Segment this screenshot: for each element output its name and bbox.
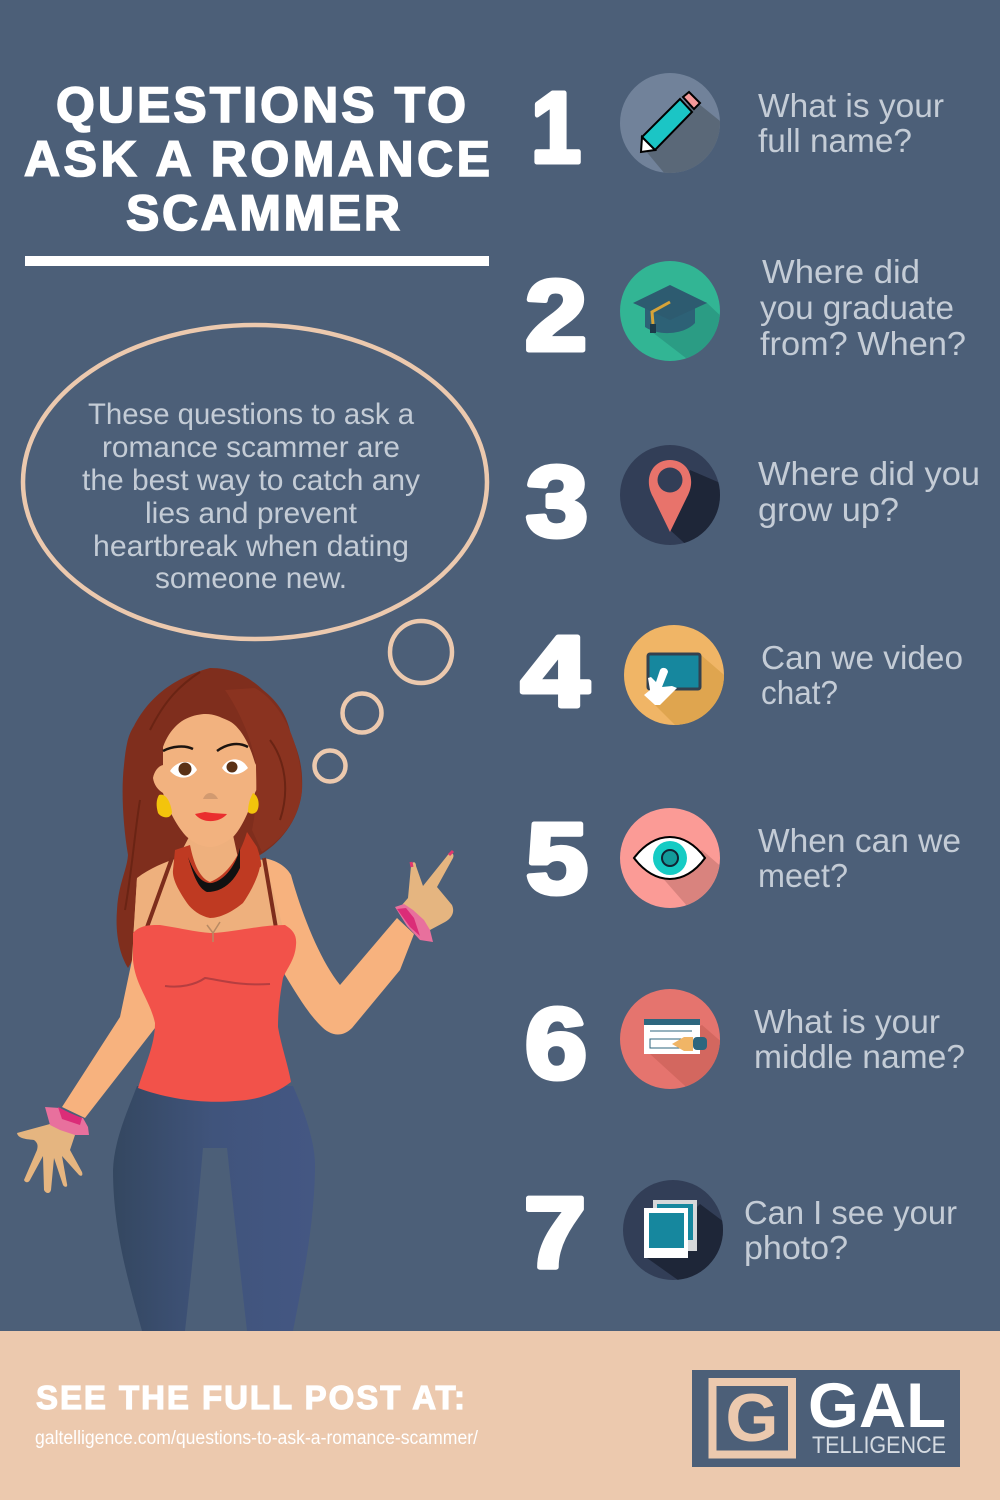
question text 3: Where did you: [758, 455, 980, 492]
chest and neck: [133, 835, 285, 940]
face: [153, 714, 260, 847]
earrings: [157, 795, 172, 817]
title: QUESTIONS TO: [56, 77, 466, 133]
thought bubble: the best way to catch any: [82, 464, 420, 497]
icon: eye: [620, 808, 720, 908]
thought bubble: [23, 325, 487, 782]
question text 6: middle name?: [754, 1038, 965, 1075]
question 4: [520, 625, 962, 725]
question text 7: [744, 1194, 957, 1266]
eyes and brows: [163, 744, 248, 778]
number 3: 3: [526, 446, 588, 558]
number 7: 7: [524, 1177, 586, 1289]
number 2: 2: [525, 260, 587, 372]
thought bubble: lies and prevent: [145, 497, 358, 530]
question text 7: Can I see your: [744, 1194, 957, 1231]
question text 3: grow up?: [758, 491, 899, 528]
question 6: [526, 989, 964, 1089]
top straps: [146, 858, 276, 930]
hair streaks: [225, 688, 302, 852]
logo: [692, 1370, 960, 1467]
right arm: [262, 858, 414, 1034]
icon: photos: [623, 1180, 728, 1285]
nose and lips: [203, 793, 218, 799]
number 4: 4: [521, 616, 589, 728]
question text 2: from? When?: [760, 325, 966, 362]
lowered wrist scrunchie: [45, 1107, 89, 1135]
question 5: [526, 808, 960, 908]
question text 5: When can we: [758, 822, 961, 859]
scarf: [173, 832, 261, 918]
question text 6: What is your: [754, 1003, 940, 1040]
logo: TELLIGENCE: [812, 1432, 946, 1459]
question text 1: full name?: [758, 122, 912, 159]
footer url: galtelligence.com/questions-to-ask-a-romance-scammer/: [35, 1428, 479, 1449]
footer band: [0, 1331, 1000, 1500]
question text 1: What is your: [758, 87, 944, 124]
left arm: [62, 878, 170, 1118]
icon: check and pen: [620, 989, 720, 1089]
question 2: [526, 259, 965, 361]
question text 4: chat?: [761, 674, 838, 711]
top: [133, 922, 296, 1102]
icon: map pin: [620, 445, 725, 550]
thought bubble: heartbreak when dating: [93, 530, 409, 563]
number 6: 6: [525, 988, 587, 1100]
question text 4: Can we video: [761, 639, 963, 676]
icon: pencil: [620, 73, 720, 173]
question text 2: [760, 253, 966, 362]
thought bubble: romance scammer are: [102, 431, 400, 464]
title underline: [25, 256, 489, 266]
logo: GAL: [808, 1371, 946, 1441]
title: SCAMMER: [126, 185, 400, 241]
footer heading: SEE THE FULL POST AT:: [36, 1379, 465, 1416]
question 3: [526, 445, 978, 545]
question text 6: [754, 1003, 965, 1075]
question text 7: photo?: [744, 1229, 848, 1266]
question text 4: [761, 639, 963, 711]
thought bubble: These questions to ask a: [88, 398, 414, 431]
number 5: 5: [526, 803, 588, 915]
jeans: [113, 1086, 315, 1331]
number 1: 1: [531, 72, 581, 184]
lowered hand: [17, 1124, 82, 1193]
question text 1: [758, 87, 944, 159]
title: [24, 77, 490, 241]
icon: touch tablet: [624, 625, 724, 725]
hair: [117, 668, 302, 968]
title: ASK A ROMANCE: [24, 131, 490, 187]
question text 2: Where did: [762, 253, 920, 290]
question 7: [526, 1180, 956, 1280]
question text 5: [758, 822, 961, 894]
raised hand: [402, 851, 453, 930]
question 1: [534, 73, 944, 173]
raised wrist scrunchie: [395, 904, 433, 942]
question text 3: [758, 455, 980, 528]
thought bubble: someone new.: [155, 562, 347, 595]
question text 5: meet?: [758, 857, 848, 894]
question text 2: you graduate: [760, 289, 954, 326]
logo: G: [726, 1380, 778, 1456]
woman illustration: [17, 668, 453, 1331]
icon: graduation cap: [620, 261, 725, 365]
